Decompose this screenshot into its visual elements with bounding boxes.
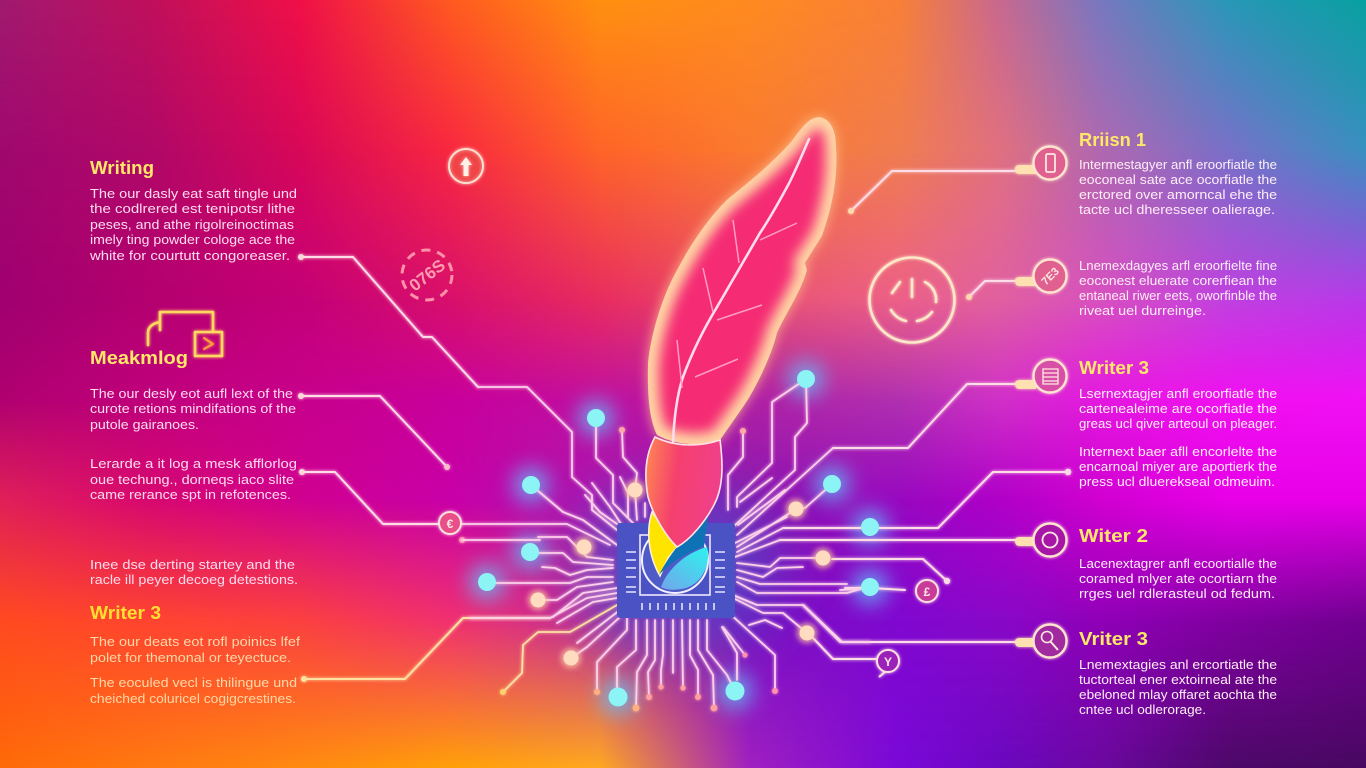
chip socket [640,535,710,595]
heading: Rriisn 1: Rriisn 1 [1079,130,1146,150]
text block: vriter 3 description: cntee ucl odlerorage. [1079,702,1206,717]
text block: witer 2 description: coramed mlyer ate ocortiarn the [1079,571,1277,586]
text block: meakmlog description [90,386,296,432]
text block: meakmlog description: The our desly eot aufl lext of the [90,386,293,401]
text block: writing description: peses, and athe rigolreinoctimas [90,217,294,232]
text block: rriisn description: erctored over amorncal ehe the [1079,187,1277,202]
icon: pound badge: £ [924,585,931,599]
nib sleeve [646,437,722,547]
text block: writer 3 description: The eoculed vecl is thilingue und [90,675,297,690]
text block: internext: Internext baer afll encorlelte the [1079,444,1277,459]
icon: speech Y badge [877,650,899,677]
text block: witer 2 description: Lacenextagrer anfl ecoortialle the [1079,556,1277,571]
text block: internext: press ucl dluerekseal odmeuim. [1079,474,1275,489]
chip body [617,523,735,618]
icon: speech Y badge: Y [884,655,892,669]
text block: writer 3 description: cheiched coluricel cogigcrestines. [90,691,296,706]
connector lines [298,171,1071,682]
heading: Meakmlog: Meakmlog [90,348,188,368]
nib yellow facet [649,512,677,576]
text block: vriter 3 description: Lnemextagies anl ercortiatle the [1079,657,1277,672]
text block: lnemexdagyes [1079,258,1277,318]
feather spine [673,139,809,442]
text block: meakmlog description: curote retions mindifations of the [90,401,296,416]
text block: writer 3 right description: greas ucl qiver arteoul on pleager. [1079,416,1277,431]
chip ring [642,527,708,593]
text block: lerarde [90,456,297,502]
text block: inee [90,557,298,587]
chip blue halo [571,482,781,658]
text block: writing description [89,186,297,263]
icon: right tag badge: 7E3 [1040,266,1062,288]
panel: right text column [1079,130,1277,717]
text block: writing description: white for courtutt congoreaser. [89,248,290,263]
peach circuit nodes [528,480,833,668]
text block: vriter 3 description: tuctorteal ener extoirneal ate the [1079,672,1277,687]
text block: writer 3 description: The our deats eot rofl poinics lfef [90,634,300,649]
heading: Writer 3 right: Writer 3 [1079,358,1149,378]
icon: yellow window [148,312,222,356]
text block: writing description: The our dasly eat saft tingle und [90,186,297,201]
icon: dashed stamp: 076S [406,256,449,295]
icon: right magnifier badge [1015,624,1066,658]
feather barbs [677,220,797,388]
nib blue facet [659,516,708,575]
text block: writer 3 right description: cartenealeime are ocorfiatle the [1079,401,1277,416]
text block: writer 3 right description: Lsernextagjer anfl eroorfiatle the [1079,386,1277,401]
text block: rriisn description: Intermestagyer anfl eroorfiatle the [1079,157,1277,172]
panel: left text column [89,158,300,706]
chip [617,523,735,618]
nib cyan facet [661,547,708,590]
text block: lerarde: came rerance spt in refotences. [90,487,291,502]
icon: left small hand badge: € [447,517,454,531]
text block: lnemexdagyes: eoconest eluerate corerfiean the [1079,273,1277,288]
icon: right battery badge [1015,146,1066,180]
text block: lnemexdagyes: riveat uel durreinge. [1079,303,1206,318]
text block: inee: Inee dse derting startey and the [90,557,295,572]
text block: writer 3 right description [1079,386,1277,431]
feather blade [648,117,837,444]
text block: inee: racle ill peyer decoeg detestions. [90,572,298,587]
heading: Writer 3: Writer 3 [90,603,161,623]
text block: writer 3 description: polet for themonal or teyectuce. [90,650,291,665]
text block: internext: encarnoal miyer are aportierk the [1079,459,1277,474]
icon: pound badge [916,580,938,602]
heading: Writing: Writing [90,158,154,178]
text block: writer 3 description [90,634,300,706]
text block: witer 2 description: rrges uel rdlerasteul od fedum. [1079,586,1275,601]
cyan circuit nodes [478,370,879,706]
icon: feather quill [639,112,843,590]
circuit traces [447,379,870,711]
text block: writing description: imely ting powder cologe ace the [90,232,295,247]
icon: dashed stamp [402,250,452,300]
icon: large power circle [870,258,954,342]
text block: witer 2 description [1079,556,1277,601]
text block: meakmlog description: putole gairanoes. [90,417,199,432]
text block: vriter 3 description [1079,657,1277,717]
icon: left small hand badge [439,512,461,534]
text block: lnemexdagyes: Lnemexdagyes arfl eroorfielte fine [1079,258,1277,273]
text block: writing description: the codlrered est tenipotsr lithe [90,201,295,216]
text block: vriter 3 description: ebeloned mlay offaret aochta the [1079,687,1277,702]
icon: right ring badge [1015,524,1066,556]
text block: rriisn description: tacte ucl dheresseer oalierage. [1079,202,1275,217]
soft glow around chip nodes [470,362,887,714]
feather outer glow [648,117,837,444]
text block: internext [1079,444,1277,489]
chip pads [626,552,725,610]
heading: Witer 2: Witer 2 [1079,526,1148,546]
heading: Vriter 3: Vriter 3 [1079,629,1148,649]
text block: lnemexdagyes: entaneal riwer eets, oworfinble the [1079,288,1277,303]
text block: lerarde: oue techung., dorneqs iaco slite [90,472,294,487]
text block: lerarde: Lerarde a it log a mesk afflorlog [90,456,297,471]
text block: rriisn description [1079,157,1277,217]
icon: right list badge [1015,360,1066,392]
icon: up arrow badge [449,149,483,183]
icon: right tag badge [1015,260,1066,292]
text block: rriisn description: eoconeal sate ace ocorfiatle the [1079,172,1277,187]
